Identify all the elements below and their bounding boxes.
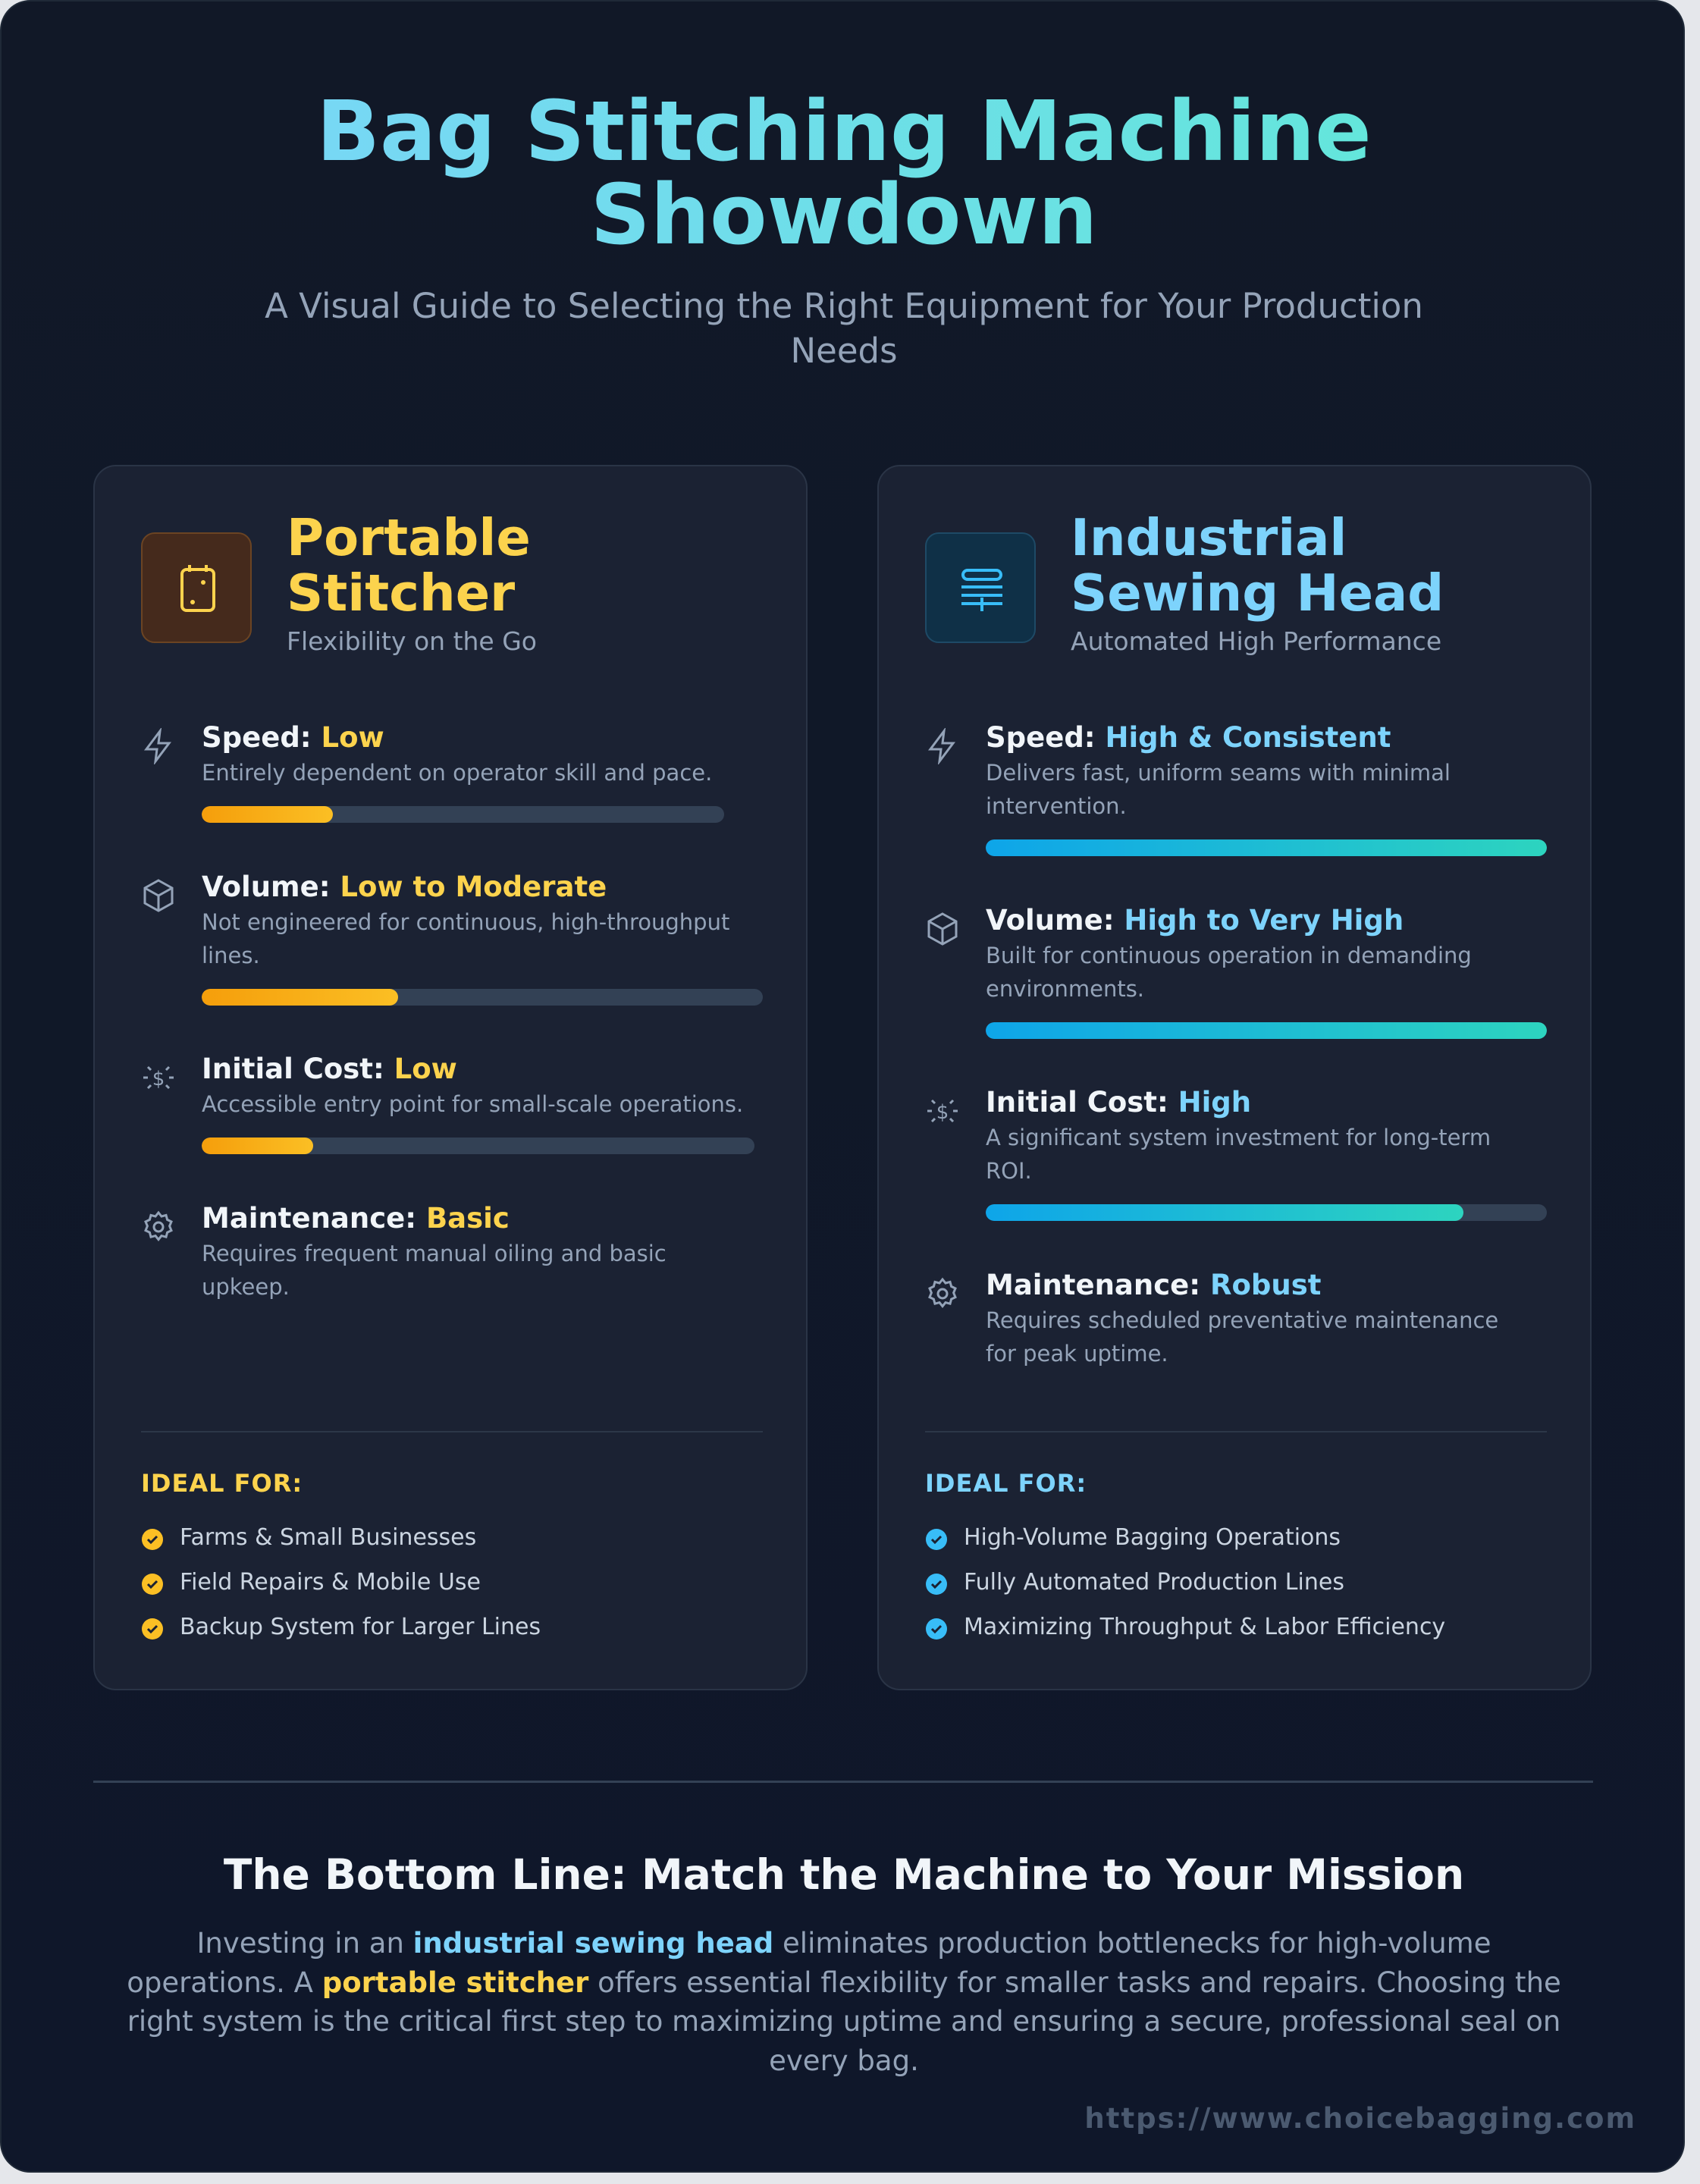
metric: maintenance: Maintenance: Robust [986,1269,1321,1301]
card subtitle: Automated High Performance [1071,626,1441,656]
subtitle: A Visual Guide to Selecting the Right Equipment for Your Production Needs [265,286,1423,371]
ideal list: High-Volume Bagging Operations [964,1524,1341,1551]
icon: box [928,912,957,946]
card title [1071,508,1444,623]
icon: box [144,879,173,912]
ideal list: Maximizing Throughput & Labor Efficiency [964,1614,1445,1640]
card title: Sewing Head [1071,563,1444,623]
card title: Industrial [1071,508,1347,567]
metric: volume: Volume: High to Very High [986,904,1404,937]
metric: initial cost [927,1086,1547,1221]
metric: speed: Entirely dependent on operator skill and pace. [202,760,712,786]
title: Showdown [590,166,1097,263]
icon: dollar [143,1066,174,1090]
metric: maintenance: Requires frequent manual oiling and basic upkeep. [202,1241,667,1300]
card title [287,508,531,623]
icon: bolt [928,728,955,764]
metric: initial cost: A significant system investment for long-term ROI. [986,1125,1491,1184]
card subtitle: Flexibility on the Go [287,626,537,656]
icon: bolt [144,728,171,764]
metric: speed: Speed: High & Consistent [986,721,1391,754]
url footer: https://www.choicebagging.com [1084,2102,1636,2135]
bottom line paragraph: operations. A portable stitcher offers essential flexibility for smaller tasks and repairs. Choosing the right system is the critical first step to maximizing uptime and ensuring a secure, professional seal on every bag. [127,1966,1561,2076]
ideal list: Fully Automated Production Lines [964,1569,1344,1596]
ideal for heading: IDEAL FOR: [925,1469,1087,1498]
metric: volume: Not engineered for continuous, high-throughput lines. [202,909,729,968]
icon: dollar: $ [152,1068,165,1090]
icon: portable device [141,532,252,643]
icon: dollar: $ [936,1101,949,1124]
metric: maintenance [144,1202,667,1300]
metric: initial cost: Accessible entry point for small-scale operations. [202,1091,743,1117]
icon: sewing head [925,532,1036,643]
ideal list [142,1524,541,1640]
icon: gear [928,1277,957,1308]
metric: maintenance: Maintenance: Basic [202,1202,510,1235]
ideal list: Field Repairs & Mobile Use [180,1569,481,1596]
card title: Portable [287,508,531,567]
panel: portable stitcher [93,465,808,1690]
metric: initial cost: Initial Cost: High [986,1086,1251,1119]
ideal list: Backup System for Larger Lines [180,1614,541,1640]
bottom line heading: The Bottom Line: Match the Machine to Your Mission [224,1850,1464,1899]
icon: dollar [927,1100,958,1124]
metric: speed: Speed: Low [202,721,384,754]
metric: maintenance [928,1269,1498,1367]
panel: industrial sewing head [877,465,1592,1690]
metric: volume [928,904,1547,1039]
metric: volume [144,871,763,1006]
ideal list: Farms & Small Businesses [180,1524,476,1551]
bottom line paragraph: Investing in an industrial sewing head eliminates production bottlenecks for high-volume [197,1927,1491,1960]
metric: initial cost: Initial Cost: Low [202,1053,457,1085]
ideal for heading: IDEAL FOR: [141,1469,303,1498]
ideal list [926,1524,1445,1640]
metric: speed [928,721,1547,856]
metric: speed: Delivers fast, uniform seams with minimal intervention. [986,760,1451,819]
metric: volume: Built for continuous operation in demanding environments. [986,943,1472,1002]
metric: volume: Volume: Low to Moderate [202,871,607,903]
title: Bag Stitching Machine [316,83,1372,180]
metric: speed [144,721,724,823]
card title: Stitcher [287,563,515,623]
metric: initial cost [143,1053,754,1154]
title [2,89,1686,256]
icon: gear [144,1210,173,1241]
metric: maintenance: Requires scheduled preventative maintenance for peak uptime. [986,1307,1498,1367]
